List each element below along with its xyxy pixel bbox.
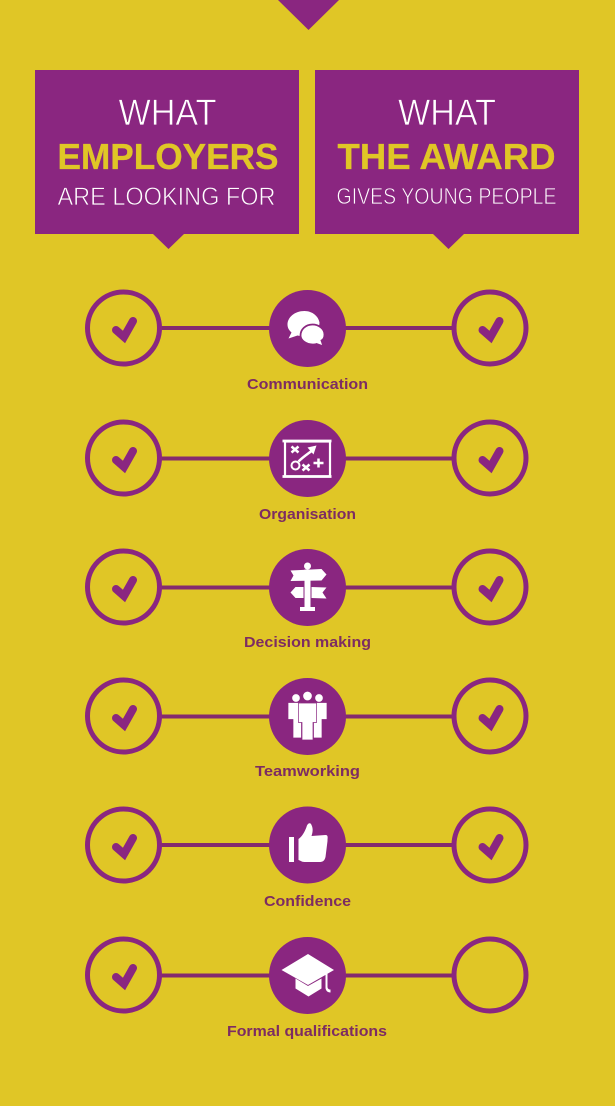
label: Formal qualifications: Formal qualifications xyxy=(227,1023,387,1040)
label: Organisation: Organisation xyxy=(259,506,356,523)
panel: what the award gives young people: WHAT xyxy=(398,92,496,133)
panel: what employers are looking for: WHAT xyxy=(118,92,216,133)
panel: what employers are looking for: ARE LOOKING FOR xyxy=(58,183,276,211)
panel: what the award gives young people xyxy=(315,70,579,249)
row: organisation xyxy=(88,420,526,523)
panel: what employers are looking for: EMPLOYERS xyxy=(58,136,278,177)
icon: graduation cap xyxy=(282,954,334,996)
row: teamworking xyxy=(88,678,526,780)
label: Teamworking: Teamworking xyxy=(255,763,360,780)
row: decision making xyxy=(88,549,526,651)
label: Decision making: Decision making xyxy=(244,634,371,651)
icon: speech bubbles xyxy=(288,311,324,346)
label: Communication: Communication xyxy=(247,376,368,393)
top pointer xyxy=(278,0,339,30)
label: Confidence: Confidence xyxy=(264,893,351,910)
row: communication xyxy=(88,290,526,393)
panel: what the award gives young people: THE AWARD xyxy=(338,136,556,177)
row: formal qualifications xyxy=(88,937,526,1040)
icon: thumbs up xyxy=(289,823,328,862)
panel: what employers are looking for xyxy=(35,70,299,249)
icon: tactics board xyxy=(282,441,332,476)
panel: what the award gives young people: GIVES YOUNG PEOPLE xyxy=(336,183,556,209)
row: confidence xyxy=(88,806,526,910)
icon: signpost xyxy=(290,562,326,611)
icon: three people xyxy=(288,691,327,740)
